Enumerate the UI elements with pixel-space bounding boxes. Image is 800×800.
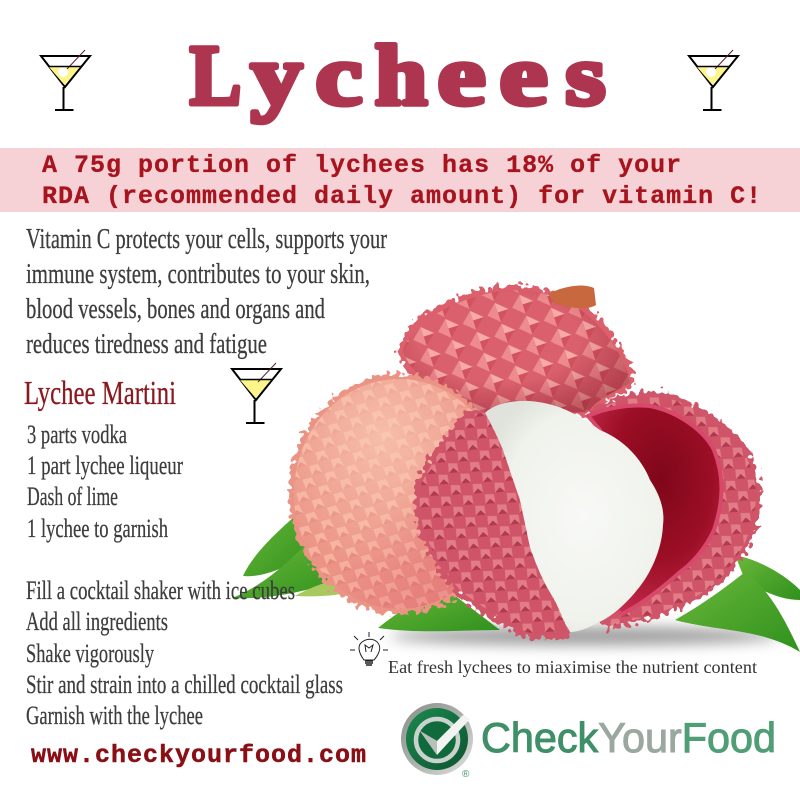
text block: vitamin C benefits [26,224,387,360]
text block: ingredients: 1 part lychee liqueur [27,451,183,480]
text block: vitamin C benefits: reduces tiredness and fatigue [26,329,267,360]
heading: Lychee Martini: Lychee Martini [24,375,176,412]
text block: vitamin C benefits: blood vessels, bones and organs and [26,294,325,325]
title: e [437,28,486,123]
website URL: www.checkyourfood.com [31,741,367,770]
text block: method: Fill a cocktail shaker with ice cubes [26,576,295,605]
callout band: vitamin C: A 75g portion of lychees has 18% of your [42,151,682,180]
shadow [390,627,780,645]
text block: ingredients: Dash of lime [27,482,118,511]
icon: light bulb [350,632,388,665]
title: c [316,27,362,123]
title: h [375,27,427,123]
text block: method: Shake vigorously [26,639,154,668]
icon: martini glass middle [232,363,281,423]
title: s [565,27,606,123]
text block: method [26,576,343,730]
logo wordmark: CheckYourFood [481,714,776,761]
text block: method: Add all ingredients [26,607,168,636]
illustration: lychees [232,285,800,652]
text block: vitamin C benefits: Vitamin C protects your cells, supports your [26,224,387,255]
title: y [251,27,302,123]
logo: CheckYourFood [401,703,776,780]
icon: martini glass left [41,50,90,110]
text block: vitamin C benefits: immune system, contributes to your skin, [26,259,370,290]
registered mark: ® [462,769,470,780]
title [190,27,606,123]
text block: method: Stir and strain into a chilled cocktail glass [26,670,343,699]
white flesh [485,401,663,632]
text block: method: Garnish with the lychee [26,701,203,730]
title: L [190,27,241,123]
callout band: vitamin C: RDA (recommended daily amount) for vitamin C! [42,182,762,211]
tip text: Eat fresh lychees to miaximise the nutrient content [388,657,757,677]
text block: ingredients: 3 parts vodka [27,420,127,449]
logo emblem [401,703,473,775]
title: e [499,28,548,123]
callout band: vitamin C [0,148,800,212]
back lychee [397,285,635,420]
open shell back [587,391,761,630]
open shell front [415,410,570,640]
leaves [232,510,800,652]
icon: martini glass right [689,50,738,110]
left lychee [289,374,509,614]
shell interior [588,405,722,614]
text block: ingredients [27,420,183,543]
text block: ingredients: 1 lychee to garnish [27,514,168,543]
